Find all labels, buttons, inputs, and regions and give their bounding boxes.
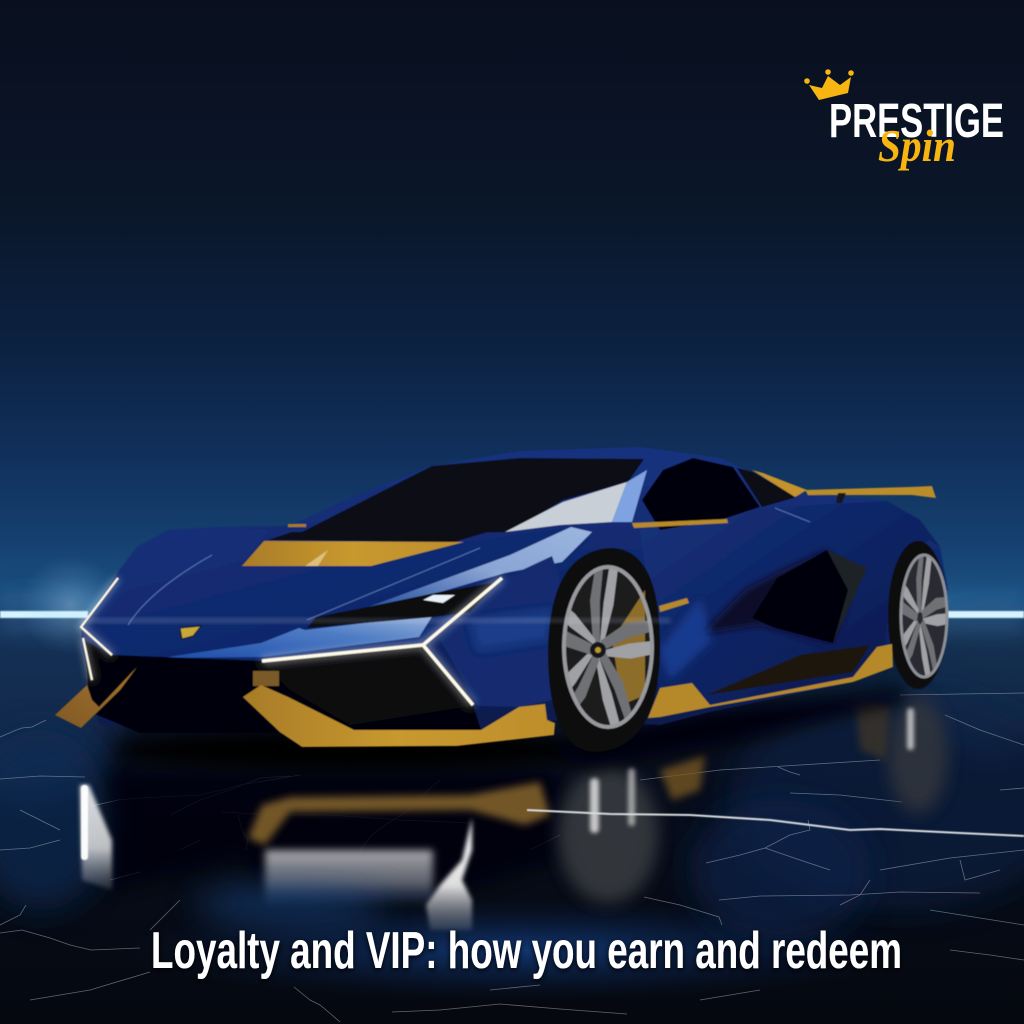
left gold splitter xyxy=(55,667,137,728)
headlight lamp xyxy=(423,595,455,603)
mirror arm xyxy=(632,519,728,528)
rear quarter window xyxy=(737,468,797,507)
badge xyxy=(180,626,201,639)
rear haunch xyxy=(640,501,940,707)
front quarter panel xyxy=(440,556,560,707)
gold hood panel xyxy=(242,541,464,566)
reflection of the car in the floor xyxy=(80,697,948,930)
main body silhouette xyxy=(81,447,948,735)
hood vent xyxy=(268,532,488,542)
black front grille xyxy=(84,640,481,733)
side sill shadow xyxy=(707,645,870,695)
hood surface xyxy=(83,527,590,660)
side highlight xyxy=(660,600,712,680)
front wheel xyxy=(542,548,660,752)
nose highlight xyxy=(161,615,433,658)
A pillar highlight xyxy=(612,470,647,522)
rear wheel xyxy=(888,541,951,689)
horizon glow line xyxy=(0,555,1024,655)
icon: crown xyxy=(804,69,854,100)
bronze grille block xyxy=(253,671,279,686)
side air intake xyxy=(700,550,867,643)
rear wing xyxy=(805,486,936,503)
windshield xyxy=(298,458,644,534)
bright white marble vein xyxy=(527,810,1024,836)
sports car xyxy=(55,447,951,752)
gold roof strip xyxy=(752,470,807,497)
fender highlight xyxy=(368,527,592,607)
ground shadow beneath car xyxy=(115,690,905,770)
small gold spoiler tab xyxy=(288,524,306,527)
lens flare streak xyxy=(80,618,670,623)
gold side skirt xyxy=(648,644,893,718)
LED light blades xyxy=(81,578,502,705)
side window xyxy=(642,458,760,530)
background sky gradient xyxy=(0,0,1024,615)
door gold accent xyxy=(659,598,689,612)
headlight slit xyxy=(307,578,502,628)
logo script: Spin xyxy=(878,121,956,171)
windshield reflection xyxy=(505,482,627,532)
marble floor xyxy=(0,600,1024,1024)
brand logo xyxy=(804,69,1004,171)
gold front splitter xyxy=(243,685,555,747)
marble veins xyxy=(0,693,1024,1022)
hood crease lines xyxy=(128,508,810,625)
